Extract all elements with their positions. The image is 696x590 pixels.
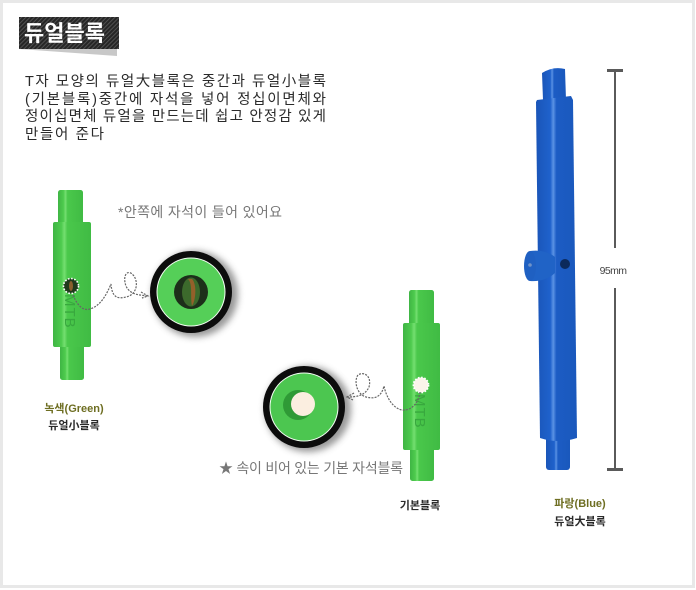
intro text: [25, 73, 326, 143]
basic block: MTB: [411, 394, 428, 429]
hollow magnet hole: [414, 378, 428, 392]
green dual small block: MTB: [61, 294, 78, 329]
dimension line: 95mm: 95mm: [600, 265, 627, 277]
intro text: T자 모양의 듀얼大블록은 중간과 듀얼小블록: [25, 73, 326, 90]
label: blue large block: 파랑(Blue): [554, 497, 606, 510]
zoom circle: basic block: [263, 366, 351, 452]
label: blue large block: [554, 497, 606, 528]
green dual small block: [53, 190, 91, 380]
label: blue large block: 듀얼大블록: [554, 514, 606, 528]
label: green small block: 녹색(Green): [44, 402, 104, 415]
intro text: (기본블록)중간에 자석을 넣어 정십이면체와: [25, 91, 326, 108]
side hole: [560, 259, 570, 269]
title badge: 듀얼블록: [24, 21, 105, 46]
dashed arrow: basic block to zoom circle: [347, 374, 420, 410]
blue dual large block: [524, 68, 577, 470]
callout: magnet inside: *안쪽에 자석이 들어 있어요: [118, 204, 282, 220]
intro text: 정이십면체 듀얼을 만드는데 쉽고 안정감 있게: [25, 108, 326, 125]
side stud: [524, 251, 555, 281]
basic block: [403, 290, 440, 481]
label: green small block: 듀얼小블록: [48, 418, 100, 432]
zoom circle: green block: [150, 251, 238, 337]
magnet hole: [64, 278, 78, 294]
label: green small block: [44, 402, 104, 432]
dashed arrow: green block to zoom circle: [73, 273, 148, 309]
label: basic block: 기본블록: [400, 498, 440, 512]
title badge: [19, 17, 119, 56]
intro text: 만들어 준다: [25, 126, 104, 143]
callout: hollow basic magnet block: ★ 속이 비어 있는 기본 자석블록: [219, 460, 403, 476]
dimension line: 95mm: [600, 69, 627, 471]
